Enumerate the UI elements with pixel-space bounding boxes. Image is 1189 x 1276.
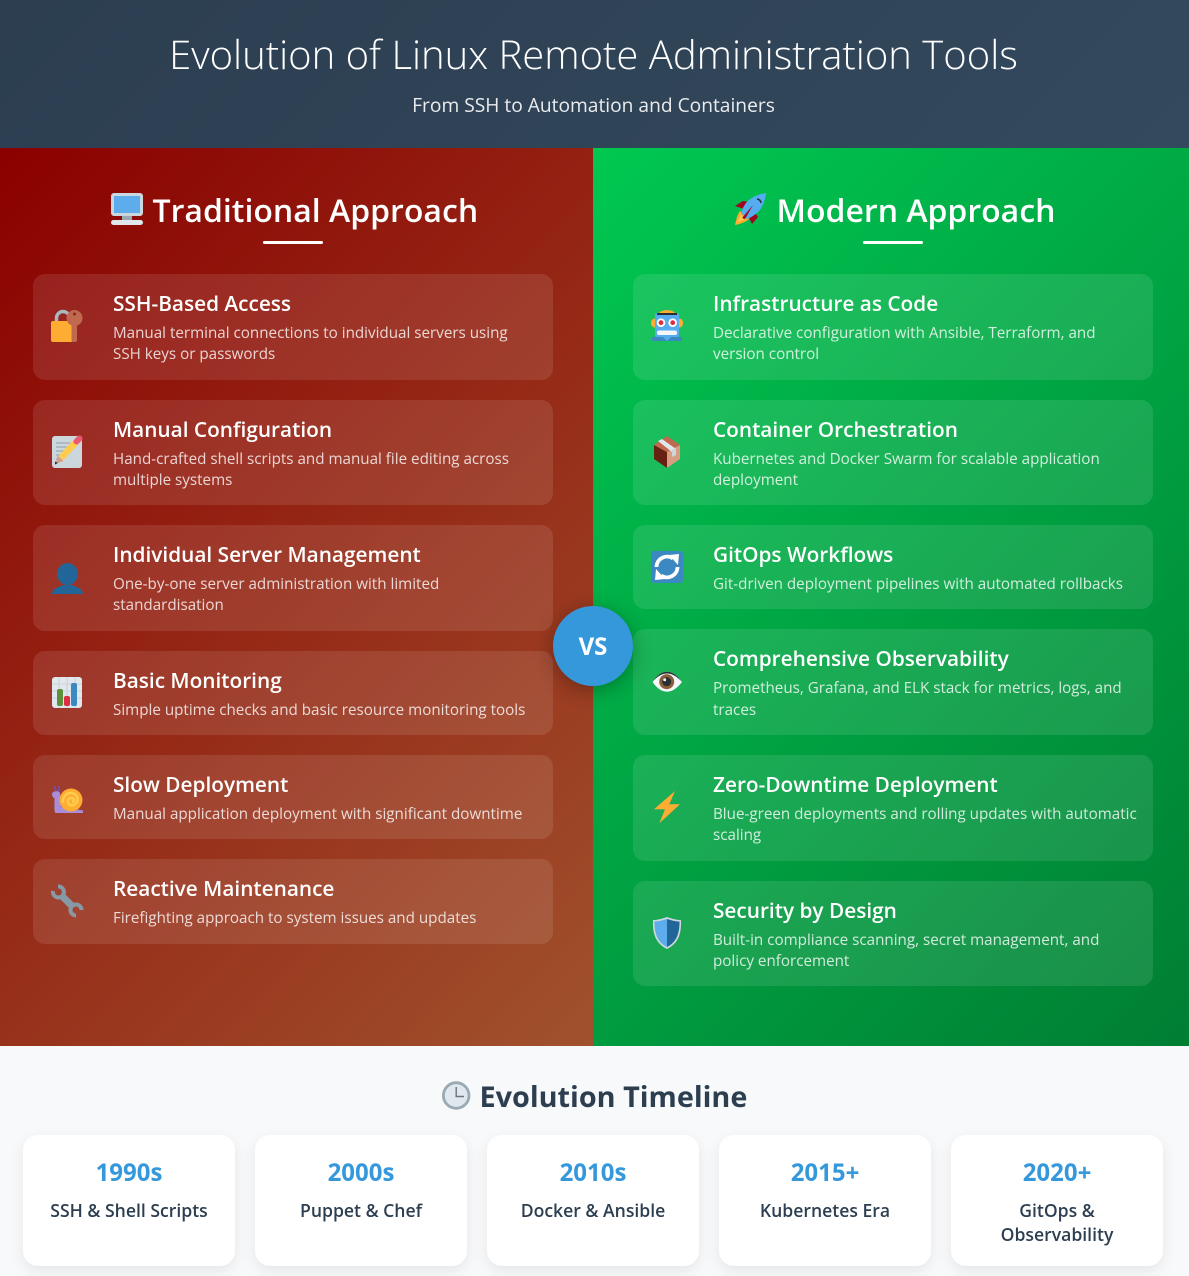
card: Zero-Downtime Deployment <box>633 755 1153 861</box>
card description: Firefighting approach to system issues and updates <box>113 908 476 928</box>
year: 2020+ <box>1023 1156 1091 1189</box>
card title: Zero-Downtime Deployment <box>713 771 998 799</box>
icon: robot <box>651 310 683 341</box>
label: Docker & Ansible <box>521 1199 665 1223</box>
timeline card: 2015+ <box>719 1135 931 1266</box>
year: 2015+ <box>791 1156 859 1189</box>
card: SSH-Based Access <box>33 274 553 380</box>
card title: Security by Design <box>713 897 897 925</box>
card description: traces <box>713 700 756 720</box>
card description <box>713 930 1099 971</box>
card description: Git-driven deployment pipelines with automated rollbacks <box>713 574 1123 594</box>
timeline card: 2020+ <box>951 1135 1163 1266</box>
card description <box>113 574 439 615</box>
heading: evolution timeline: Evolution Timeline <box>480 1077 747 1116</box>
label: GitOps & <box>1019 1199 1095 1223</box>
icon: snail <box>52 786 83 813</box>
card title: GitOps Workflows <box>713 541 893 569</box>
card description: Built-in compliance scanning, secret management, and <box>713 930 1099 950</box>
left column cards <box>33 274 553 944</box>
card description <box>713 449 1100 490</box>
VS badge <box>553 606 633 686</box>
card: Slow Deployment <box>33 755 553 839</box>
card description <box>113 449 509 490</box>
card description <box>713 678 1122 720</box>
card: Basic Monitoring <box>33 651 553 735</box>
year: 2010s <box>560 1156 626 1189</box>
icon: refresh arrows <box>651 551 683 583</box>
card: Reactive Maintenance <box>33 859 553 944</box>
header banner <box>0 0 1189 148</box>
icon: lightning bolt <box>654 791 680 824</box>
card description: Hand-crafted shell scripts and manual file editing across <box>113 449 509 469</box>
heading underline: traditional <box>263 241 323 244</box>
icon: memo <box>52 436 82 468</box>
timeline card: 2000s <box>255 1135 467 1266</box>
card description: multiple systems <box>113 470 232 490</box>
timeline card: 2010s <box>487 1135 699 1266</box>
icon: shield <box>652 917 682 949</box>
card description: Manual application deployment with significant downtime <box>113 804 522 824</box>
panel: traditional approach <box>0 148 593 1046</box>
card description: deployment <box>713 470 798 490</box>
card description: version control <box>713 344 819 364</box>
card description: standardisation <box>113 595 224 615</box>
card: Security by Design <box>633 881 1153 986</box>
timeline card: 1990s <box>23 1135 235 1266</box>
card title: Container Orchestration <box>713 416 958 444</box>
heading: modern approach: Modern Approach <box>776 189 1055 232</box>
right column cards <box>633 274 1153 986</box>
VS badge: VS <box>579 630 607 663</box>
card: Container Orchestration <box>633 400 1153 505</box>
card title: Comprehensive Observability <box>713 645 1009 673</box>
card description: SSH keys or passwords <box>113 344 275 364</box>
card description: scaling <box>713 825 761 845</box>
card description: policy enforcement <box>713 951 849 971</box>
card description <box>713 323 1096 364</box>
card description: Blue-green deployments and rolling updates with automatic <box>713 804 1137 824</box>
icon: eye <box>652 672 682 692</box>
icon: lock and key <box>51 310 82 342</box>
card title: Slow Deployment <box>113 771 288 799</box>
card title: Basic Monitoring <box>113 667 282 695</box>
card title: Manual Configuration <box>113 416 332 444</box>
label: Puppet & Chef <box>300 1199 422 1223</box>
year: 2000s <box>328 1156 394 1189</box>
label: SSH & Shell Scripts <box>50 1199 208 1223</box>
label <box>1001 1199 1114 1247</box>
icon: rocket <box>735 193 766 225</box>
card title: Reactive Maintenance <box>113 875 334 903</box>
card description <box>113 323 508 364</box>
card title: Individual Server Management <box>113 541 421 569</box>
card title: Infrastructure as Code <box>713 290 938 318</box>
card title: SSH-Based Access <box>113 290 291 318</box>
icon: wrench <box>50 884 84 918</box>
heading: traditional approach: Traditional Approach <box>152 189 478 232</box>
title: Evolution of Linux Remote Administration Tools <box>169 26 1018 81</box>
card description: Kubernetes and Docker Swarm for scalable application <box>713 449 1100 469</box>
card description <box>713 804 1137 845</box>
heading underline: modern <box>863 241 923 244</box>
card description: Manual terminal connections to individual servers using <box>113 323 508 343</box>
card: GitOps Workflows <box>633 525 1153 609</box>
label: Observability <box>1001 1223 1113 1247</box>
icon: bar chart <box>52 677 82 708</box>
panel: modern approach <box>593 148 1189 1046</box>
label: Kubernetes Era <box>760 1199 890 1223</box>
card: Individual Server Management <box>33 525 553 631</box>
card: Manual Configuration <box>33 400 553 505</box>
card description: One-by-one server administration with limited <box>113 574 439 594</box>
card description: Declarative configuration with Ansible, Terraform, and <box>713 323 1096 343</box>
icon: person silhouette <box>52 563 83 594</box>
year: 1990s <box>96 1156 162 1189</box>
card: Infrastructure as Code <box>633 274 1153 380</box>
icon: clock <box>442 1081 470 1110</box>
timeline section <box>0 1046 1189 1276</box>
card: Comprehensive Observability <box>633 629 1153 735</box>
card description: Simple uptime checks and basic resource monitoring tools <box>113 700 525 720</box>
icon: package <box>654 436 680 468</box>
icon: computer <box>111 193 143 225</box>
subtitle: From SSH to Automation and Containers <box>412 91 775 118</box>
card description: Prometheus, Grafana, and ELK stack for metrics, logs, and <box>713 678 1122 698</box>
